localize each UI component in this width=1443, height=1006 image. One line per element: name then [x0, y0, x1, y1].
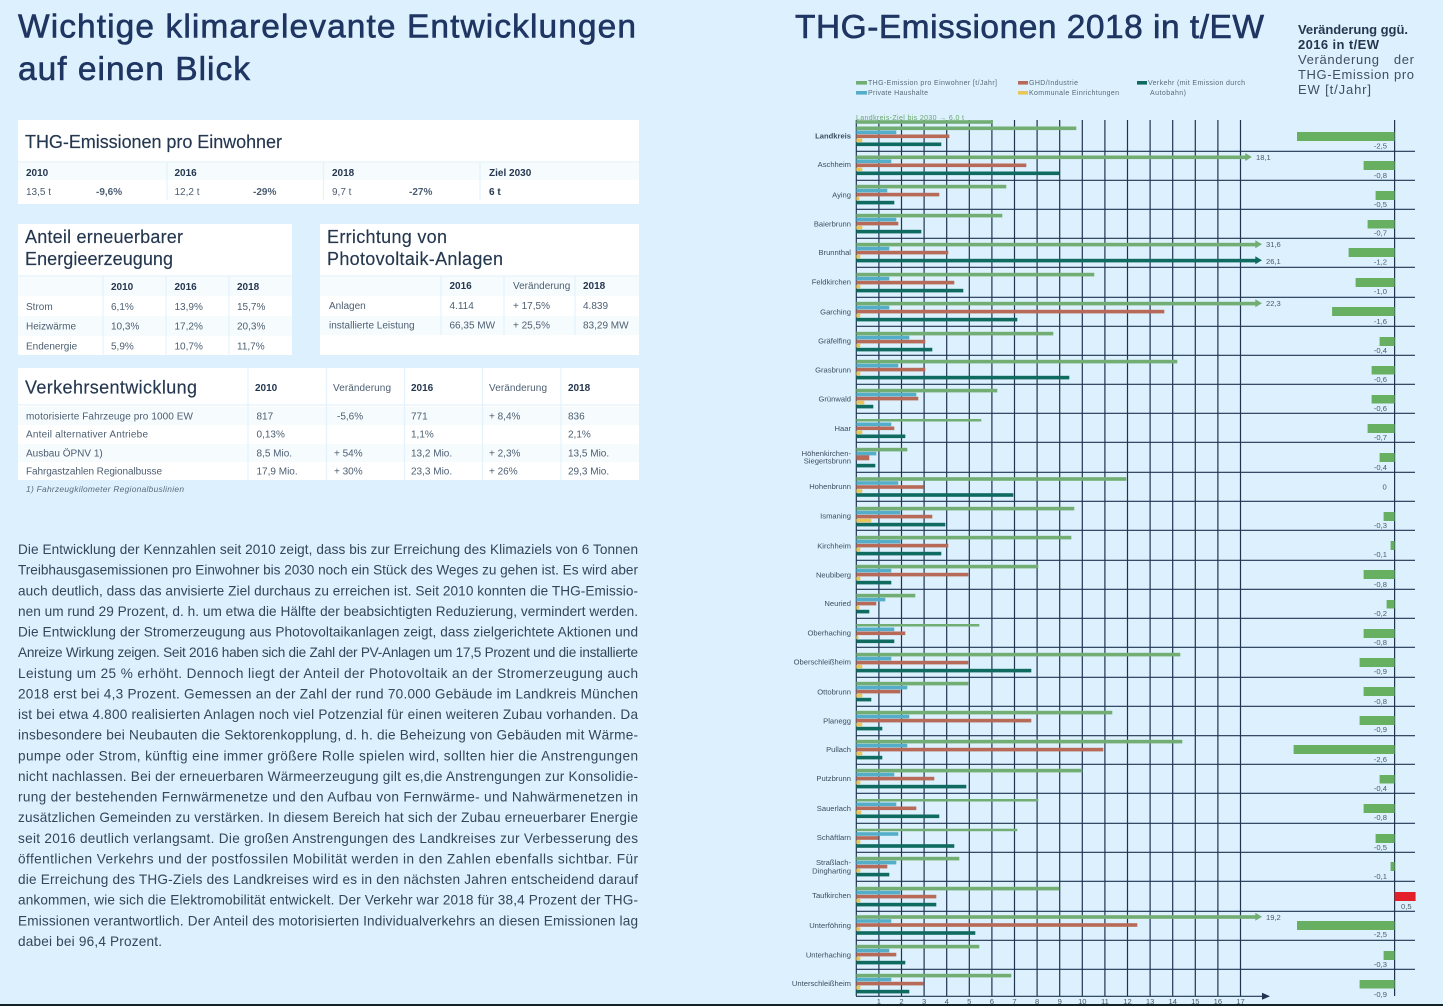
row: Garching: 22,3 [1266, 299, 1281, 308]
panel: Anteil erneuerbarer Energieerzeugung: Heizwärme [26, 322, 76, 332]
row: Aschheim: 18,1 [1256, 153, 1271, 162]
panel: Verkehrsentwicklung: 0,13% [256, 430, 285, 440]
axis labels: 12 [1123, 997, 1132, 1006]
axis labels: 15 [1191, 997, 1200, 1006]
row: Unterhaching: Unterhaching [806, 950, 851, 959]
panel: Errichtung von Photovoltaik-Anlagen [320, 224, 639, 355]
panel: Verkehrsentwicklung: 1,1% [411, 430, 434, 440]
row: Aschheim: -0,8 [1374, 171, 1387, 180]
row: Grasbrunn: -0,6 [1374, 375, 1387, 384]
row: Putzbrunn: -0,4 [1374, 784, 1387, 793]
axis labels: 2 [899, 997, 904, 1006]
panel: Verkehrsentwicklung: 23,3 Mio. [411, 466, 452, 478]
row: Haar: -0,7 [1374, 433, 1387, 442]
row: Taufkirchen: Taufkirchen [812, 891, 851, 900]
row: Unterföhring: Unterföhring [809, 921, 851, 930]
text block: body paragraph: Emissionen verantwortlich. Der Anteil des motorisierten Individualverkehrs an diesen Emissionen lag [18, 913, 638, 928]
panel: Verkehrsentwicklung [18, 368, 639, 480]
panel: Errichtung von Photovoltaik-Anlagen: + 17,5% [513, 301, 550, 312]
heading: Verkehrsentwicklung: Verkehrsentwicklung [25, 378, 197, 398]
row: Kirchheim [817, 536, 1395, 559]
text block: body paragraph: Die Entwicklung der Kennzahlen seit 2010 zeigt, dass bis zur Erreichung des Klimaziels von 6 Tonnen [18, 542, 638, 557]
row: Oberschleißheim: Oberschleißheim [794, 657, 851, 666]
text block: body paragraph: pumpe oder Strom, künftig eine immer größere Rolle spielen wird, sollten hier die Anstrengungen [18, 748, 638, 763]
legend [856, 80, 1245, 97]
row: Brunnthal: 26,1 [1266, 257, 1281, 266]
row: Haar: Haar [835, 424, 851, 433]
row: Unterschleißheim: Unterschleißheim [792, 979, 851, 988]
text block: body paragraph: Leistung um 25 % erhöht. Dennoch liegt der Anteil der Photovoltaik an der Stromerzeugung auch [18, 666, 638, 681]
row: Planegg [823, 711, 1395, 734]
axis labels [877, 997, 1245, 1006]
row: Ottobrunn: -0,8 [1374, 697, 1387, 706]
text block: body paragraph: 2018 erst bei 4,3 Prozent. Gemessen an der Zahl der rund 70.000 Gebäude im Landkreis München [18, 686, 638, 701]
row: Gräfelfing [818, 332, 1395, 355]
text block: body paragraph: seit 2016 deutlich verlangsamt. Die großen Anstrengungen des Landkreises zur Verbesserung des [18, 831, 638, 846]
axis labels: 11 [1101, 997, 1109, 1006]
row: Brunnthal [818, 240, 1395, 266]
text block: body paragraph: Treibhausgasemissionen pro Einwohner bis 2030 noch ein Stück des Weges zu gehen ist. Es wird aber [18, 563, 638, 578]
axis labels: 6 [990, 997, 994, 1006]
row: Unterföhring: 19,2 [1266, 913, 1281, 922]
row: Straßlach-Dingharting: Straßlach- [816, 858, 851, 867]
row: Putzbrunn: Putzbrunn [816, 774, 851, 783]
row: Gräfelfing: -0,4 [1374, 346, 1387, 355]
panel: Verkehrsentwicklung: Veränderung [489, 383, 547, 394]
panel: Verkehrsentwicklung: + 8,4% [489, 412, 521, 422]
row: Putzbrunn [816, 769, 1395, 793]
row: Baierbrunn [814, 214, 1395, 238]
row: Planegg: -0,9 [1374, 725, 1387, 734]
panel: Errichtung von Photovoltaik-Anlagen: 2018 [583, 281, 606, 292]
title: Wichtige klimarelevante Entwicklungen [18, 8, 636, 88]
row: Ottobrunn [817, 682, 1395, 706]
row: Garching: -1,6 [1374, 317, 1387, 326]
panel: Verkehrsentwicklung: + 54% [334, 448, 363, 460]
row: Höhenkirchen-Siegertsbrunn: -0,4 [1374, 463, 1387, 472]
row: Taufkirchen [812, 887, 1416, 911]
panel: Verkehrsentwicklung: 8,5 Mio. [256, 448, 292, 460]
row: Feldkirchen [812, 273, 1395, 296]
panel: Anteil erneuerbarer Energieerzeugung: 2016 [174, 282, 197, 293]
panel: Verkehrsentwicklung: 771 [411, 412, 428, 422]
row: Garching [820, 299, 1395, 326]
arrow: x axis [1262, 993, 1270, 1000]
legend: THG-Emission pro Einwohner [t/Jahr] [868, 80, 997, 87]
panel: THG-Emissionen pro Einwohner: 2010 [26, 168, 49, 179]
panel: Verkehrsentwicklung: 13,5 Mio. [568, 448, 609, 460]
text block: Veränderung ggü. 2016: Veränderung ggü. [1298, 22, 1408, 37]
row: Neubiberg: Neubiberg [816, 570, 851, 579]
row: Landkreis [815, 126, 1394, 150]
heading: Errichtung von Photovoltaik-Anlagen: Photovoltaik-Anlagen [327, 249, 503, 269]
row: Oberhaching: Oberhaching [808, 628, 851, 637]
row: Taufkirchen: 0,5 [1401, 902, 1412, 911]
title: Wichtige klimarelevante Entwicklungen: auf einen Blick [18, 51, 250, 88]
text block: body paragraph: nen um rund 29 Prozent, d. h. um etwa die Hälfte der beabsichtigten Reduzierung, vermindert werden. [18, 604, 638, 619]
text block: body paragraph: Die Entwicklung der Stromerzeugung aus Photovoltaikanlagen zeigt, dass zielgerichtete Aktionen und [18, 624, 638, 640]
heading: Errichtung von Photovoltaik-Anlagen: Errichtung von [327, 227, 447, 247]
footnote: 1) Fahrzeugkilometer Regionalbuslinien [26, 484, 184, 494]
row: Schäftlarn: -0,5 [1374, 843, 1387, 852]
panel: THG-Emissionen pro Einwohner [18, 120, 639, 204]
panel: THG-Emissionen pro Einwohner: 12,2 t [174, 187, 200, 198]
axis labels: 16 [1214, 997, 1222, 1006]
axis labels: 3 [922, 997, 926, 1006]
title: Wichtige klimarelevante Entwicklungen: Wichtige klimarelevante Entwicklungen [18, 8, 636, 46]
row: Grünwald: Grünwald [818, 394, 851, 403]
panel: THG-Emissionen pro Einwohner: 2018 [332, 168, 355, 179]
panel: THG-Emissionen pro Einwohner: Ziel 2030 [489, 168, 532, 179]
panel: Anteil erneuerbarer Energieerzeugung: 15,7% [237, 302, 265, 313]
panel: Verkehrsentwicklung: Anteil alternativer Antriebe [26, 430, 148, 440]
title: THG-Emissionen 2018 in t/EW: THG-Emissionen 2018 in t/EW [795, 9, 1264, 46]
row: Straßlach-Dingharting: Dingharting [812, 866, 851, 875]
row: Brunnthal: Brunnthal [818, 248, 851, 257]
text block: body paragraph: öffentlichen Verkehrs und der postfossilen Mobilität werden in den Zahlen ebenfalls sichtbar. Für [18, 852, 638, 866]
row: Pullach: -2,6 [1374, 755, 1387, 764]
panel: Anteil erneuerbarer Energieerzeugung: 10,7% [174, 342, 203, 352]
row: Pullach: Pullach [826, 745, 851, 754]
panel: Anteil erneuerbarer Energieerzeugung: 2010 [111, 282, 134, 293]
row: Kirchheim: Kirchheim [817, 541, 851, 550]
axis labels: 13 [1146, 997, 1154, 1006]
heading: THG-Emissionen pro Einwohner: THG-Emissionen pro Einwohner [25, 132, 282, 152]
row: Sauerlach: Sauerlach [817, 804, 851, 813]
panel: Verkehrsentwicklung: 2,1% [568, 430, 591, 440]
row: Sauerlach [817, 799, 1395, 822]
text block: body paragraph: insbesondere bei Neubauten die Sektorenkopplung, d. h. die Beheizung von Gebäuden mit Wärme- [18, 728, 638, 743]
row: Grünwald: -0,6 [1374, 404, 1387, 413]
text block: body paragraph: zusätzlichen Gemeinden zu verstärken. In diesem Bereich hat sich der Zubau erneuerbarer Energie [18, 810, 638, 825]
row: Gräfelfing: Gräfelfing [818, 336, 851, 345]
text block: body paragraph: dabei bei 96,4 Prozent. [18, 934, 162, 949]
panel: Anteil erneuerbarer Energieerzeugung: 13,9% [174, 302, 203, 313]
panel: Errichtung von Photovoltaik-Anlagen: 4.114 [450, 301, 474, 312]
row: Höhenkirchen-Siegertsbrunn: Siegertsbrunn [804, 456, 851, 466]
legend: GHD/Industrie [1029, 80, 1078, 87]
row: Oberhaching [808, 624, 1395, 647]
text block: Veränderung ggü. 2016 [1298, 22, 1415, 97]
row: Garching: Garching [820, 307, 851, 316]
row: Hohenbrunn: 0 [1382, 482, 1387, 492]
target label: Landkreis-Ziel [856, 115, 993, 124]
row: Feldkirchen: -1,0 [1374, 287, 1387, 296]
row: Unterföhring [809, 913, 1394, 939]
row: Grasbrunn [815, 360, 1395, 384]
row: Unterschleißheim: -0,9 [1374, 990, 1387, 999]
row: Aschheim: Aschheim [818, 160, 851, 169]
row: Landkreis: Landkreis [815, 131, 851, 140]
row: Höhenkirchen-Siegertsbrunn: Höhenkirchen- [802, 449, 851, 458]
chart: THG-Emissionen je Kommune [792, 115, 1416, 1006]
heading: Anteil erneuerbarer Energieerzeugung [25, 227, 183, 269]
panel: Verkehrsentwicklung: -5,6% [337, 412, 363, 422]
panel: Anteil erneuerbarer Energieerzeugung: Strom [26, 302, 53, 313]
row: Schäftlarn: Schäftlarn [817, 833, 851, 842]
row: Grünwald [818, 389, 1395, 413]
target label: Landkreis-Ziel: Landkreis-Ziel bis 2030 → 6,0 t [856, 115, 964, 122]
panel: Verkehrsentwicklung: 2018 [568, 383, 591, 394]
row: Landkreis: -2,5 [1374, 142, 1387, 150]
row: Brunnthal: -1,2 [1374, 258, 1387, 266]
panel: Errichtung von Photovoltaik-Anlagen: Veränderung [513, 281, 570, 292]
panel: Verkehrsentwicklung: 17,9 Mio. [256, 466, 298, 478]
row: Ismaning: Ismaning [820, 511, 851, 520]
axis labels: 1 [877, 997, 881, 1006]
row: Neuried [824, 594, 1395, 618]
row: Ottobrunn: Ottobrunn [817, 687, 851, 696]
text block: Veränderung ggü. 2016: EW [t/Jahr] [1298, 82, 1371, 97]
axis labels: 10 [1078, 997, 1087, 1006]
row: Kirchheim: -0,1 [1374, 550, 1387, 559]
panel: Verkehrsentwicklung: Ausbau ÖPNV 1) [26, 448, 103, 460]
legend: Autobahn) [1150, 90, 1186, 97]
panel: THG-Emissionen pro Einwohner: 9,7 t [332, 187, 352, 198]
text block: body paragraph: rung der bestehenden Fernwärmenetze und den Aufbau von Fernwärme- und Nahwärmenetzen in [18, 790, 638, 805]
text block: Veränderung ggü. 2016: Veränderung der [1298, 52, 1415, 67]
panel: THG-Emissionen pro Einwohner: -29% [253, 187, 276, 198]
row: Schäftlarn [817, 829, 1395, 852]
panel: Anteil erneuerbarer Energieerzeugung: 5,9% [111, 342, 134, 352]
panel: THG-Emissionen pro Einwohner: 2016 [174, 168, 197, 179]
row: Baierbrunn: Baierbrunn [814, 220, 851, 229]
panel: Errichtung von Photovoltaik-Anlagen: Anlagen [329, 301, 366, 312]
row: Oberschleißheim [794, 653, 1395, 676]
panel: Anteil erneuerbarer Energieerzeugung: 10,3% [111, 322, 139, 332]
row: Unterföhring: -2,5 [1374, 930, 1387, 939]
row: Höhenkirchen-Siegertsbrunn [802, 448, 1395, 472]
row: Oberschleißheim: -0,9 [1374, 667, 1387, 676]
panel: Anteil erneuerbarer Energieerzeugung: 6,1% [111, 302, 134, 313]
row: Baierbrunn: -0,7 [1374, 228, 1387, 238]
legend: Verkehr (mit Emission durch [1148, 80, 1245, 87]
row: Grasbrunn: Grasbrunn [815, 365, 851, 374]
row: Straßlach-Dingharting [812, 857, 1395, 881]
row: Aying: -0,5 [1374, 200, 1387, 209]
panel: Verkehrsentwicklung: + 2,3% [489, 448, 521, 460]
row: Aying: Aying [832, 191, 851, 200]
panel: Verkehrsentwicklung: 29,3 Mio. [568, 466, 609, 478]
panel: Anteil erneuerbarer Energieerzeugung: 11,7% [237, 342, 265, 352]
row: Unterschleißheim [792, 974, 1395, 999]
row: Pullach [826, 740, 1395, 764]
text block: body paragraph [18, 542, 638, 949]
panel: Anteil erneuerbarer Energieerzeugung: 2018 [237, 282, 260, 293]
row: Sauerlach: -0,8 [1374, 813, 1387, 822]
row: Unterhaching [806, 945, 1395, 969]
row: Neuried: Neuried [824, 599, 851, 608]
panel: THG-Emissionen pro Einwohner: -9,6% [96, 187, 122, 198]
row: Haar [835, 419, 1395, 442]
panel: Verkehrsentwicklung: 817 [256, 412, 274, 422]
panel: Anteil erneuerbarer Energieerzeugung: 20,3% [237, 322, 265, 332]
row: Neuried: -0,2 [1374, 609, 1387, 618]
panel: Errichtung von Photovoltaik-Anlagen: 83,29 MW [583, 320, 629, 332]
heading: Errichtung von Photovoltaik-Anlagen [327, 227, 503, 269]
text block: body paragraph: ankommen, wie sich die Elektromobilität entwickelt. Der Verkehr war 2018 für 38,4 Prozent der THG- [18, 893, 638, 908]
panel: Errichtung von Photovoltaik-Anlagen: + 25,5% [513, 320, 550, 332]
panel: Verkehrsentwicklung: motorisierte Fahrzeuge pro 1000 EW [26, 412, 194, 422]
text block: body paragraph: nicht nachlassen. Bei der erneuerbaren Wärmeerzeugung gilt es,die Anstrengungen zur Konsolidie- [18, 769, 638, 784]
row: Feldkirchen: Feldkirchen [812, 277, 851, 286]
row: Planegg: Planegg [823, 716, 851, 725]
row: Oberhaching: -0,8 [1374, 638, 1387, 647]
panel: Anteil erneuerbarer Energieerzeugung: 17,2% [174, 322, 203, 332]
panel: Verkehrsentwicklung: + 30% [334, 466, 363, 478]
row: Unterhaching: -0,3 [1374, 960, 1387, 969]
row: Neubiberg [816, 565, 1395, 589]
heading: Anteil erneuerbarer Energieerzeugung: Energieerzeugung [25, 249, 173, 269]
panel: THG-Emissionen pro Einwohner: 6 t [489, 187, 501, 198]
text block: Veränderung ggü. 2016: THG-Emission pro [1298, 67, 1414, 82]
row: Hohenbrunn: Hohenbrunn [809, 482, 851, 491]
panel: Verkehrsentwicklung: 13,2 Mio. [411, 448, 452, 460]
axis labels: 5 [967, 997, 971, 1006]
axis labels: 17 [1236, 997, 1245, 1006]
panel: Errichtung von Photovoltaik-Anlagen: 66,35 MW [450, 320, 496, 332]
panel: Anteil erneuerbarer Energieerzeugung [18, 224, 292, 355]
row: Ismaning: -0,3 [1374, 521, 1387, 530]
panel: Anteil erneuerbarer Energieerzeugung: Endenergie [26, 342, 78, 352]
legend: Private Haushalte [868, 90, 928, 97]
panel: Errichtung von Photovoltaik-Anlagen: 2016 [450, 281, 472, 292]
text block: body paragraph: ist bei etwa 4.800 realisierten Anlagen noch viel Potzenzial für einen weiteren Zubau vorhanden. Da [18, 707, 638, 722]
panel: Verkehrsentwicklung: + 26% [489, 466, 518, 478]
row: Ismaning [820, 507, 1395, 530]
text block: body paragraph: auch deutlich, dass das anvisierte Ziel durchaus zu erreichen ist. Seit 2010 konnten die THG-Emissio- [18, 583, 638, 598]
row: Brunnthal: 31,6 [1266, 240, 1281, 249]
panel: Verkehrsentwicklung: Fahrgastzahlen Regionalbusse [26, 466, 162, 478]
panel: Verkehrsentwicklung: 836 [568, 412, 585, 422]
row: Aying [832, 185, 1395, 209]
text block: body paragraph: Anreize Wirkung zeigen. Seit 2016 haben sich die Zahl der PV-Anlagen um 17,5 Prozent und die installierte [18, 645, 638, 660]
panel: THG-Emissionen pro Einwohner: 13,5 t [26, 187, 51, 198]
row: Neubiberg: -0,8 [1374, 580, 1387, 589]
row: Hohenbrunn [809, 477, 1387, 497]
text block: body paragraph: die Erreichung des THG-Ziels des Landkreises wird es in den nächsten Jahren entscheidend darauf [18, 872, 638, 887]
axis labels: 7 [1012, 997, 1017, 1006]
panel: Errichtung von Photovoltaik-Anlagen: 4.839 [583, 301, 608, 312]
panel: Verkehrsentwicklung: Veränderung [333, 383, 391, 394]
axis labels: 9 [1058, 997, 1062, 1006]
heading: Anteil erneuerbarer Energieerzeugung: Anteil erneuerbarer [25, 227, 183, 247]
panel: THG-Emissionen pro Einwohner: -27% [409, 187, 432, 198]
axis labels: 14 [1168, 997, 1177, 1006]
text block: Veränderung ggü. 2016: 2016 in t/EW [1298, 37, 1380, 52]
panel: Verkehrsentwicklung: 2016 [411, 383, 434, 394]
panel: Verkehrsentwicklung: 2010 [255, 383, 278, 394]
row: Aschheim [818, 153, 1395, 180]
axis labels: 8 [1035, 997, 1039, 1006]
row: Straßlach-Dingharting: -0,1 [1374, 872, 1387, 881]
panel: Errichtung von Photovoltaik-Anlagen: installierte Leistung [329, 320, 415, 332]
axis labels: 4 [945, 997, 949, 1006]
legend: Kommunale Einrichtungen [1029, 90, 1119, 97]
